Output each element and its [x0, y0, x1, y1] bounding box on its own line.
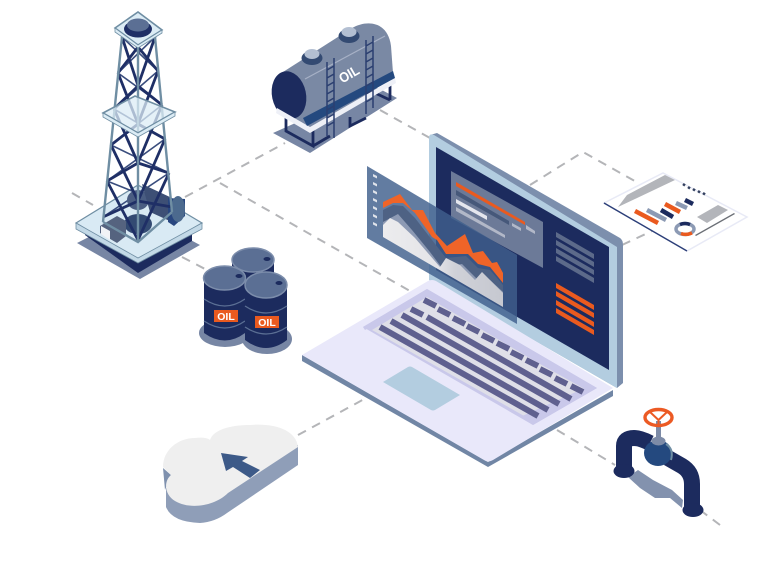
trackpad [383, 366, 460, 410]
laptop screen back edge [430, 133, 623, 388]
icon: report document [604, 173, 747, 251]
tower base block [85, 225, 192, 273]
valve body [644, 440, 672, 466]
upload arrow [221, 453, 260, 478]
icon: oil barrels [199, 248, 292, 354]
valve shadow [628, 470, 683, 508]
floating chart panel [367, 166, 517, 324]
tank platform [276, 78, 396, 133]
icon: oil storage tank [267, 23, 397, 153]
laptop base deck [302, 280, 613, 462]
laptop screen frame [429, 134, 617, 388]
icon: laptop [302, 133, 623, 467]
laptop screen display [436, 147, 609, 370]
tower legs [103, 37, 172, 242]
keyboard well [363, 289, 597, 425]
tank end cap [267, 68, 311, 122]
back barrel [232, 248, 274, 295]
barrel shadow [199, 319, 292, 354]
pump machinery [100, 184, 185, 243]
back lattice [103, 37, 172, 217]
laptop base edge [302, 355, 613, 467]
valve wheel [645, 410, 672, 426]
cloud extrusion [166, 445, 298, 523]
screen text lines [556, 232, 594, 283]
lattice braces [103, 37, 172, 240]
pipe flanges [614, 464, 704, 517]
document sheet [604, 173, 747, 251]
right barrel: OIL [258, 317, 276, 329]
tank legs [286, 85, 390, 146]
left barrel: OIL [217, 311, 235, 323]
crown block [124, 20, 152, 38]
screen orange lines [556, 283, 594, 335]
middle platform [103, 96, 175, 133]
cloud top [163, 425, 298, 506]
top platform [115, 12, 162, 45]
keyboard keys [380, 300, 583, 416]
document bars [635, 200, 693, 223]
tower base platform [76, 185, 202, 260]
ladders [327, 36, 373, 138]
tower base shadow [77, 212, 200, 279]
icon: oil derrick tower [76, 12, 202, 279]
icon: cloud upload [163, 425, 298, 523]
tank body [283, 23, 393, 122]
document text [618, 175, 735, 236]
icon: pipe valve [614, 410, 704, 517]
document donut chart [676, 224, 694, 234]
pipe [624, 438, 692, 510]
valve stem [656, 421, 661, 440]
tank label: OIL [336, 62, 362, 86]
tank shadow [273, 87, 397, 153]
document dots [683, 184, 705, 194]
screen info panel [451, 171, 543, 268]
hatches [302, 27, 360, 65]
